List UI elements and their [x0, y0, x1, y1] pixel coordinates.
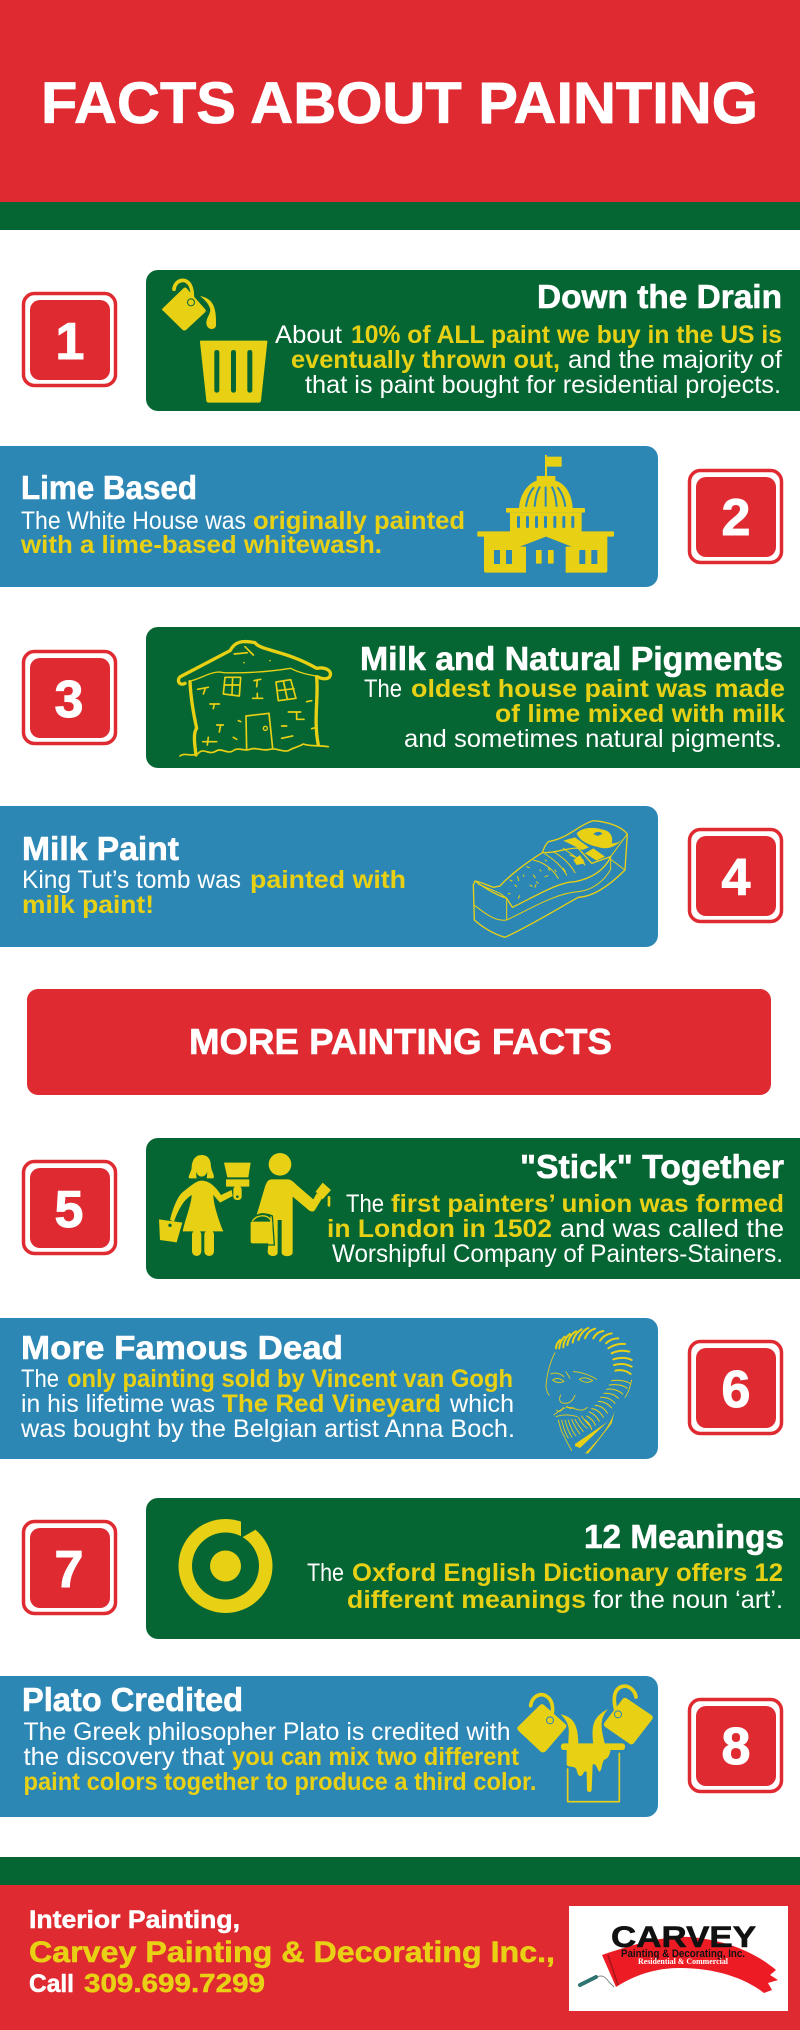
panel 5: Stick Together	[24, 1138, 800, 1279]
text block: and the majority of	[568, 346, 782, 374]
text block: for the noun ‘art’.	[593, 1586, 783, 1614]
number badge 6: 6	[722, 1361, 750, 1419]
heading: Plato Credited	[22, 1681, 243, 1718]
text block: oldest house paint was made	[411, 675, 785, 703]
number badge 7	[24, 1522, 116, 1614]
number badge 7: 7	[55, 1541, 83, 1599]
heading: Milk and Natural Pigments	[360, 640, 783, 677]
text block: only painting sold by Vincent van Gogh	[67, 1365, 513, 1393]
text block: The	[21, 1365, 59, 1393]
number badge 3	[24, 652, 116, 744]
number badge 2: 2	[722, 489, 750, 547]
panel 1: Down the Drain	[24, 270, 800, 411]
header banner	[0, 0, 800, 230]
text block: of lime mixed with milk	[495, 700, 785, 728]
logo: Carvey Painting and Decorating: Painting & Decorating, Inc.	[621, 1948, 745, 1960]
icon: capitol building	[477, 455, 614, 573]
text block	[307, 1559, 783, 1614]
logo: Carvey Painting and Decorating: CARVEY	[611, 1921, 756, 1954]
banner: more painting facts: MORE PAINTING FACTS	[189, 1021, 612, 1062]
text block: which	[449, 1390, 514, 1418]
text block: you can mix two different	[232, 1743, 520, 1771]
text block: milk paint!	[22, 891, 154, 919]
text block: Worshipful Company of Painters-Stainers.	[332, 1240, 783, 1268]
footer text	[29, 1906, 555, 1998]
heading: Lime Based	[21, 469, 197, 506]
text block	[22, 866, 406, 919]
number badge 5	[24, 1162, 116, 1254]
text block: The White House was	[21, 507, 246, 535]
icon: two painters	[159, 1153, 331, 1256]
text block: Oxford English Dictionary offers 12	[352, 1559, 783, 1587]
text block	[364, 675, 785, 753]
icon: two cans pouring into bucket	[517, 1686, 653, 1802]
banner: more painting facts	[27, 989, 771, 1095]
text block: The Red Vineyard	[222, 1390, 441, 1418]
number badge 6	[690, 1342, 782, 1434]
heading: More Famous Dead	[21, 1329, 343, 1366]
text block: different meanings	[347, 1586, 586, 1614]
text block: The	[364, 675, 402, 703]
text block: paint colors together to produce a third color.	[24, 1768, 536, 1796]
text block: 10% of ALL paint we buy in the US is	[351, 321, 782, 349]
text block	[20, 1365, 515, 1443]
text block: the discovery that	[24, 1743, 225, 1771]
logo: Carvey Painting and Decorating: Residential & Commercial	[638, 1957, 729, 1966]
text block: The	[346, 1190, 384, 1218]
number badge 1	[24, 294, 116, 386]
panel 2: Lime Based	[0, 446, 782, 587]
icon: ring and dot	[178, 1512, 272, 1613]
text block: first painters’ union was formed	[391, 1190, 784, 1218]
number badge 3: 3	[55, 671, 83, 729]
panel 3: Milk and Natural Pigments	[24, 627, 800, 768]
text block	[20, 507, 465, 559]
number badge 4	[690, 830, 782, 922]
footer	[0, 1857, 800, 2030]
icon: van Gogh portrait	[546, 1328, 632, 1453]
heading: 12 Meanings	[584, 1518, 784, 1555]
footer text: Carvey Painting & Decorating Inc.,	[29, 1936, 555, 1969]
title: FACTS ABOUT PAINTING	[41, 71, 758, 136]
number badge 1: 1	[56, 313, 84, 371]
text block: The Greek philosopher Plato is credited with	[24, 1718, 510, 1746]
footer text: Call	[29, 1970, 74, 1998]
panel 8: Plato Credited	[0, 1676, 782, 1817]
heading: Down the Drain	[537, 278, 782, 315]
text block: that is paint bought for residential projects.	[305, 371, 781, 399]
text block: was bought by the Belgian artist Anna Boch.	[20, 1415, 515, 1443]
panel 4: Milk Paint	[0, 806, 782, 947]
text block: The	[307, 1559, 344, 1587]
panel 6: More Famous Dead	[0, 1318, 782, 1459]
footer text: 309.699.7299	[84, 1968, 265, 1998]
text block: eventually thrown out,	[291, 346, 560, 374]
number badge 5: 5	[55, 1181, 83, 1239]
text block: King Tut’s tomb was	[22, 866, 241, 894]
text block: in London in 1502	[327, 1215, 552, 1243]
text block: About	[275, 321, 342, 349]
text block	[275, 321, 782, 399]
text block: and was called the	[560, 1215, 784, 1243]
text block: with a lime-based whitewash.	[20, 531, 382, 559]
logo: Carvey Painting and Decorating	[569, 1906, 788, 2011]
text block	[24, 1718, 536, 1796]
text block: originally painted	[253, 507, 465, 535]
heading: "Stick" Together	[520, 1148, 784, 1185]
heading: Milk Paint	[22, 830, 179, 867]
panel 7: 12 Meanings	[24, 1498, 800, 1639]
icon: paint can over bin	[162, 280, 267, 403]
text block: painted with	[250, 866, 406, 894]
text block	[327, 1190, 784, 1268]
footer text: Interior Painting,	[29, 1906, 240, 1934]
number badge 8	[690, 1700, 782, 1792]
number badge 8: 8	[722, 1718, 750, 1776]
text block: and sometimes natural pigments.	[404, 725, 782, 753]
text block: in his lifetime was	[21, 1390, 215, 1418]
icon: hand-drawn house	[178, 642, 330, 756]
icon: sarcophagus	[473, 821, 627, 937]
number badge 4: 4	[722, 849, 751, 907]
number badge 2	[690, 470, 782, 562]
